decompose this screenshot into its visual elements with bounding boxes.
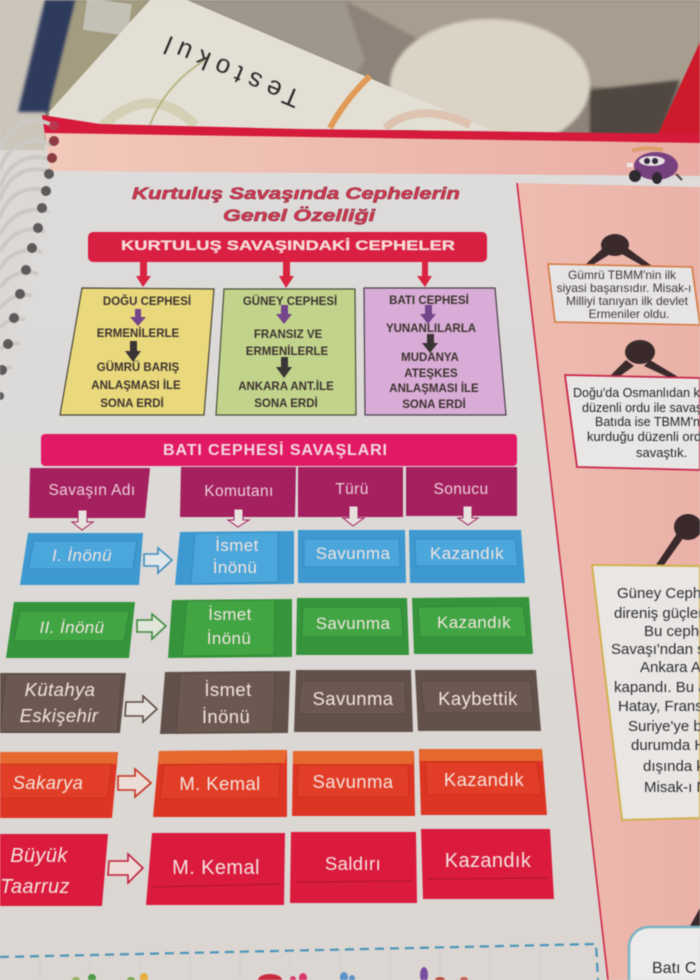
Kazandık cell: Kazandık (445, 850, 532, 872)
II. İnönü cell: II. İnönü (39, 618, 105, 637)
Sakarya cell: Sakarya (13, 772, 83, 793)
Savunma cell: Savunma (313, 771, 394, 792)
Kaybettik cell: Kaybettik (438, 688, 518, 709)
title: Genel Özelliği (223, 206, 377, 225)
Büyük Taarruz cell: Büyük (10, 845, 68, 867)
M. Kemal cell: M. Kemal (179, 773, 261, 794)
column header: Türü (298, 467, 403, 526)
column header: Savaşın Adı (29, 468, 150, 530)
callout: Batı Cephesi (partial) (629, 908, 700, 980)
title (132, 184, 460, 225)
spiral binding (0, 121, 59, 400)
callout: Gümrü (548, 234, 700, 325)
notebook cover: Testokul (49, 0, 491, 130)
Saldırı cell: Saldırı (325, 853, 381, 874)
İsmet İnönü cell: İnönü (213, 558, 257, 577)
arrow (125, 696, 157, 722)
İsmet İnönü cell: İnönü (207, 629, 251, 648)
pin (610, 340, 680, 378)
panel: Güney Cephesi: GÜNEY CEPHESİ (243, 295, 337, 308)
panel: Güney Cephesi: ERMENİLERLE (246, 345, 329, 358)
arrow (118, 769, 151, 797)
Büyük Taarruz cell: Taarruz (0, 876, 70, 898)
activity box at bottom (dashed) (0, 944, 598, 980)
callout: Gümrü: Gümrü TBMM'nin ilk (568, 268, 677, 282)
panel: Doğu Cephesi: SONA ERDİ (100, 397, 164, 410)
M. Kemal cell (146, 833, 285, 905)
panel: Batı Cephesi: ANLAŞMASI İLE (389, 382, 479, 395)
red arrows from header (136, 262, 432, 288)
panel: Doğu Cephesi: ERMENİLERLE (97, 327, 180, 340)
Kazandık cell: Kazandık (444, 769, 525, 790)
column header: Komutanı (180, 467, 296, 527)
callout: Doğu ve Batı orduları: savaştık. (636, 445, 687, 460)
Kazandık cell: Kazandık (437, 613, 511, 632)
panel: Batı Cephesi: YUNANLILARLA (386, 323, 476, 335)
panel: Güney Cephesi (216, 289, 356, 415)
Savunma cell: Savunma (316, 614, 390, 633)
right pink panel (517, 183, 700, 980)
Büyük Taarruz cell (0, 834, 108, 906)
arrow (108, 854, 143, 883)
Kütahya Eskişehir cell: Kütahya (25, 679, 95, 700)
callout: Güney Cephesi (592, 514, 700, 820)
panel: Güney Cephesi: SONA ERDİ (254, 397, 318, 410)
page top band (42, 115, 700, 176)
callout: Gümrü: siyasi başarısıdır. Misak-ı (557, 281, 691, 295)
callout: Gümrü: Ermeniler oldu. (589, 307, 669, 321)
Savunma cell: Savunma (313, 688, 394, 709)
header: Batı Cephesi Savaşları (41, 434, 517, 466)
İsmet İnönü cell: İsmet (208, 605, 252, 624)
callout: Batı Cephesi (partial): Batı C (652, 960, 696, 977)
M. Kemal cell: M. Kemal (172, 857, 260, 879)
column header: Sonucu: Sonucu (434, 481, 488, 498)
Sakarya cell (0, 752, 118, 818)
header: Batı Cephesi Savaşları: BATI CEPHESİ SAVAŞLARI (163, 441, 387, 459)
photo background behind the book (0, 0, 700, 151)
callout: Güney Cephesi: Suriye'ye b (628, 718, 700, 735)
Kazandık cell (421, 829, 554, 899)
panel: Batı Cephesi: MUDANYA (401, 352, 459, 364)
panel: Batı Cephesi: SONA ERDİ (402, 398, 466, 411)
İsmet İnönü cell: İnönü (202, 706, 250, 727)
row: Kütahya Eskişehir (0, 670, 541, 734)
column header: Sonucu (406, 467, 517, 525)
title: Kurtuluş Savaşında Cephelerin (132, 184, 460, 203)
column header: Türü: Türü (335, 481, 369, 498)
mascot (627, 148, 682, 184)
row: II. İnönü (6, 597, 533, 658)
notebook name: Testokul (153, 27, 304, 114)
İsmet İnönü cell (168, 599, 292, 658)
I. İnönü cell: I. İnönü (52, 546, 112, 565)
panel: Doğu Cephesi: DOĞU CEPHESİ (103, 295, 191, 308)
panel: Batı Cephesi (364, 288, 506, 415)
Savunma cell (298, 530, 406, 583)
I. İnönü cell (20, 533, 143, 585)
Kaybettik cell (415, 670, 541, 731)
header: Kurtuluş Savaşındaki Cepheler: KURTULUŞ SAVAŞINDAKİ CEPHELER (121, 238, 455, 253)
Kazandık cell: Kazandık (430, 544, 504, 563)
panel: Güney Cephesi: FRANSIZ VE (254, 329, 323, 341)
İsmet İnönü cell (175, 531, 294, 585)
M. Kemal cell (153, 750, 287, 817)
panel: Batı Cephesi: ATEŞKES (404, 368, 458, 380)
Kütahya Eskişehir cell: Eskişehir (20, 705, 99, 726)
Savunma cell (294, 670, 413, 732)
Savunma cell: Savunma (316, 544, 390, 563)
arrow (137, 614, 166, 639)
panel: Doğu Cephesi: ANLAŞMASI İLE (91, 379, 181, 392)
Saldırı cell (290, 832, 417, 903)
column header: Komutanı: Komutanı (204, 483, 274, 500)
callout: Doğu ve Batı orduları (565, 340, 700, 470)
Savunma cell (296, 598, 409, 655)
pin (586, 234, 652, 266)
İsmet İnönü cell (160, 671, 290, 734)
II. İnönü cell (6, 602, 135, 658)
Kazandık cell (412, 597, 533, 654)
header: Kurtuluş Savaşındaki Cepheler (88, 232, 487, 262)
panel: Doğu Cephesi: GÜMRÜ BARIŞ (97, 361, 180, 374)
column header: Savaşın Adı: Savaşın Adı (48, 482, 136, 499)
row: Sakarya (0, 749, 547, 818)
row: Büyük Taarruz (0, 829, 554, 906)
Kütahya Eskişehir cell (0, 673, 126, 733)
Savunma cell (292, 751, 415, 816)
pin (656, 514, 700, 565)
callout: Gümrü: Milliyi tanıyan ilk devlet (566, 294, 689, 308)
panel: Doğu Cephesi (60, 288, 214, 415)
Kazandık cell (419, 749, 547, 815)
arrow (144, 548, 172, 573)
Kazandık cell (409, 530, 525, 583)
panel: Güney Cephesi: ANKARA ANT.İLE (238, 380, 334, 393)
İsmet İnönü cell: İsmet (204, 679, 252, 700)
panel: Batı Cephesi: BATI CEPHESİ (389, 294, 469, 307)
row: I. İnönü (20, 530, 525, 585)
İsmet İnönü cell: İsmet (215, 536, 259, 555)
